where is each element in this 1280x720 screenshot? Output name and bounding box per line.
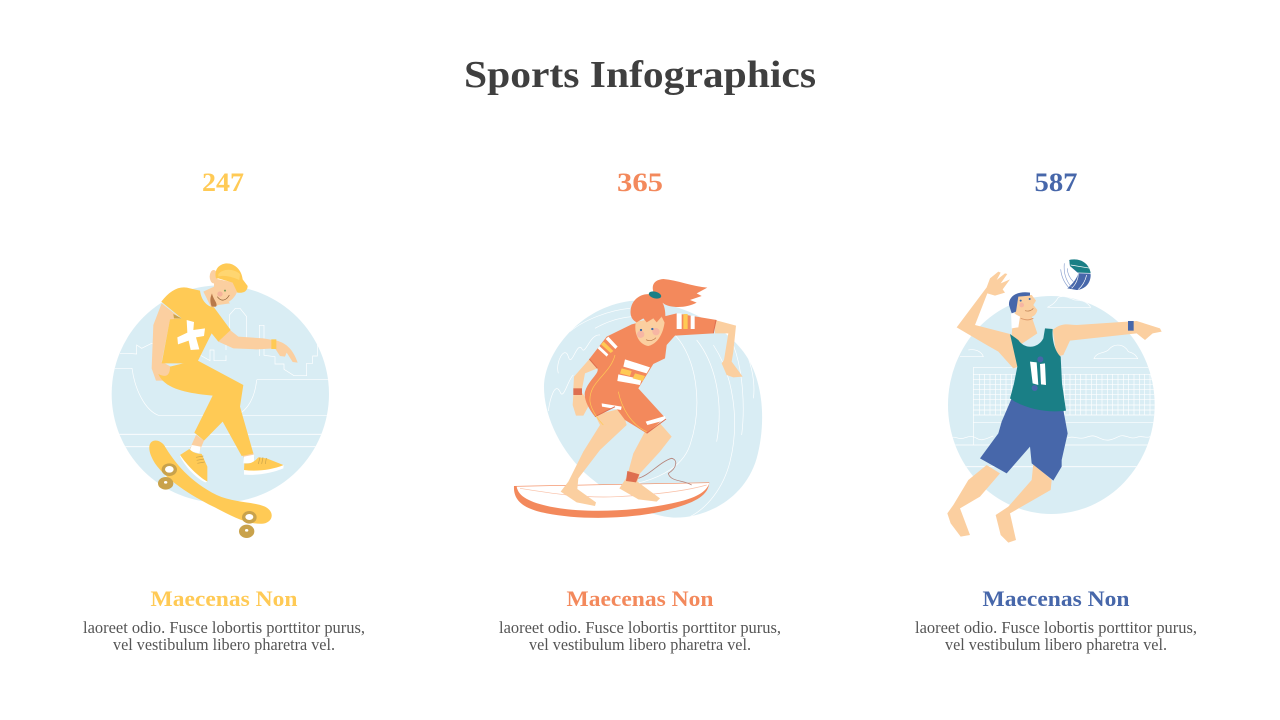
text block: vel vestibulum libero pharetra vel. xyxy=(945,635,1167,654)
text block: laoreet odio. Fusce lobortis porttitor purus, xyxy=(915,618,1197,637)
panel: skateboarder xyxy=(83,168,365,654)
text block xyxy=(499,618,781,654)
panel: volleyball player xyxy=(915,168,1197,654)
heading: Maecenas Non xyxy=(982,586,1130,611)
illustration: skateboarder xyxy=(110,263,330,538)
skater figure xyxy=(152,263,298,482)
text block: laoreet odio. Fusce lobortis porttitor purus, xyxy=(83,618,365,637)
leash xyxy=(638,458,692,485)
number: 365: 365 xyxy=(617,168,663,197)
surfboard xyxy=(514,482,709,518)
surfer figure xyxy=(561,279,743,506)
volleyball xyxy=(1061,259,1091,290)
number: 587: 587 xyxy=(1034,168,1078,197)
text block: vel vestibulum libero pharetra vel. xyxy=(113,635,335,654)
heading: Maecenas Non xyxy=(566,586,714,611)
panel: surfer xyxy=(499,168,781,654)
player figure xyxy=(947,272,1162,543)
illustration: volleyball player xyxy=(947,259,1162,543)
text block xyxy=(915,618,1197,654)
text block xyxy=(83,618,365,654)
title: Sports Infographics xyxy=(464,54,816,96)
text block: vel vestibulum libero pharetra vel. xyxy=(529,635,751,654)
text block: laoreet odio. Fusce lobortis porttitor purus, xyxy=(499,618,781,637)
illustration: surfer xyxy=(514,279,762,518)
skateboard xyxy=(149,441,272,538)
heading: Maecenas Non xyxy=(150,586,298,611)
number: 247: 247 xyxy=(202,168,244,197)
